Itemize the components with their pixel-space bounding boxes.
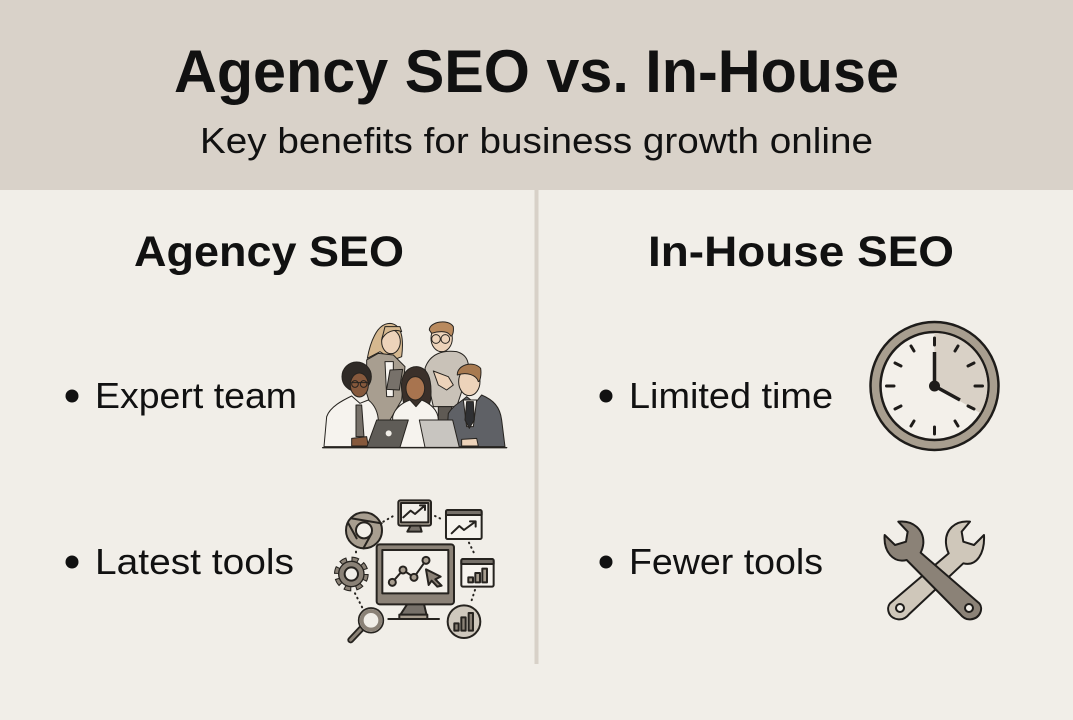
gear	[337, 560, 365, 588]
woman centre	[401, 367, 431, 413]
icon: SEO tools around a monitor	[337, 500, 494, 640]
main monitor	[377, 544, 454, 619]
bullet: Latest tools: Latest tools	[95, 541, 294, 582]
bar chart badge	[448, 605, 480, 638]
man left	[324, 396, 378, 447]
dark wrench	[885, 521, 981, 619]
title: Agency SEO vs. In-House	[174, 38, 899, 105]
dotted connectors	[355, 515, 475, 608]
small monitor	[398, 500, 431, 532]
magnifier	[351, 608, 383, 640]
browser bars	[461, 559, 494, 587]
subtitle: Key benefits for business growth online	[200, 120, 873, 161]
light wrench	[888, 521, 984, 619]
man with glasses	[425, 351, 468, 407]
bullet: Fewer tools: Fewer tools	[629, 541, 823, 582]
laptops	[367, 420, 408, 447]
man right	[446, 395, 505, 447]
icon: crossed wrenches	[885, 521, 984, 619]
bullet: Expert team: Expert team	[95, 375, 297, 416]
icon: business team with laptops	[323, 322, 507, 448]
browser logo	[346, 512, 382, 548]
browser chart	[446, 510, 482, 539]
icon: clock	[870, 322, 998, 450]
heading: In-House SEO: In-House SEO	[648, 228, 954, 276]
blonde woman	[367, 323, 402, 360]
bullet: Limited time: Limited time	[629, 375, 833, 416]
heading: Agency SEO: Agency SEO	[134, 228, 404, 276]
panel: In-House SEO	[600, 228, 998, 619]
header band	[0, 0, 1073, 190]
panel: Agency SEO	[66, 228, 507, 640]
